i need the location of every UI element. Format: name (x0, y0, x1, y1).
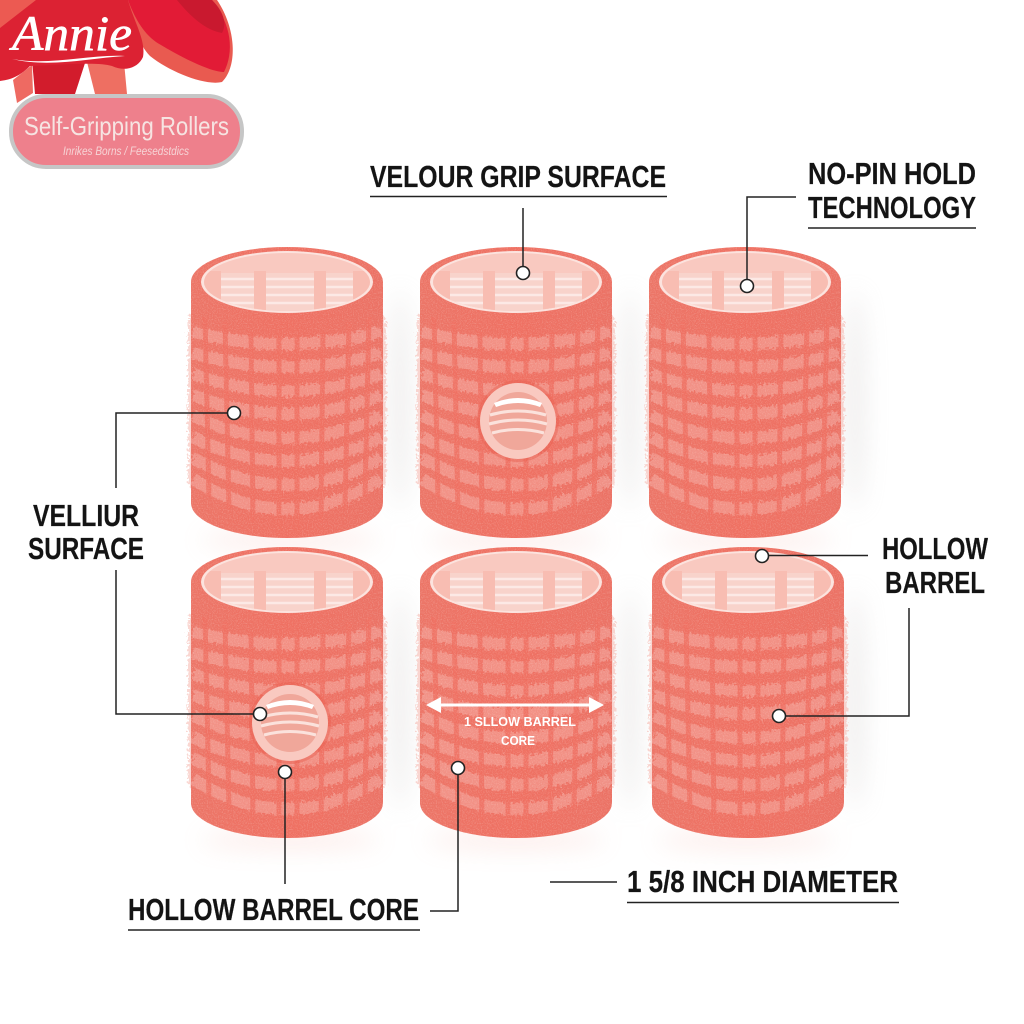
label: hollow barrel (756, 531, 989, 722)
label: no-pin hold technology (740, 156, 976, 292)
roller bottom right (647, 547, 849, 842)
label: hollow barrel core (128, 762, 464, 930)
label: 1 5/8 inch diameter (550, 864, 899, 902)
label: hollow barrel: BARREL (885, 565, 985, 600)
label: hollow barrel: HOLLOW (882, 531, 989, 566)
label: no-pin hold technology: TECHNOLOGY (808, 190, 976, 225)
badge: self-gripping rollers (11, 96, 242, 167)
roller bottom left (186, 547, 388, 842)
soft shadows (200, 290, 865, 848)
width arrow with overlay text: 1 SLLOW BARREL (464, 714, 576, 729)
label: velour grip surface (370, 159, 667, 280)
badge: self-gripping rollers: Self-Gripping Rollers (24, 111, 229, 141)
roller top right (644, 247, 846, 542)
roller bottom middle (415, 547, 617, 842)
logo flower (0, 0, 233, 103)
label: velliur surface: VELLIUR (33, 498, 139, 533)
roller top left (186, 247, 388, 542)
label: no-pin hold technology: NO-PIN HOLD (808, 156, 976, 191)
logo wordmark: Annie (9, 5, 132, 61)
badge: self-gripping rollers: Inrikes Borns / Feesedstdics (63, 146, 189, 158)
label: velliur surface (28, 406, 266, 720)
label: 1 5/8 inch diameter: 1 5/8 INCH DIAMETER (627, 864, 898, 899)
label: velliur surface: SURFACE (28, 531, 144, 566)
label: hollow barrel core: HOLLOW BARREL CORE (128, 892, 419, 927)
width arrow with overlay text: CORE (501, 733, 535, 748)
label: velour grip surface: VELOUR GRIP SURFACE (370, 159, 666, 194)
roller top middle (415, 247, 617, 542)
width arrow with overlay text (426, 697, 604, 748)
